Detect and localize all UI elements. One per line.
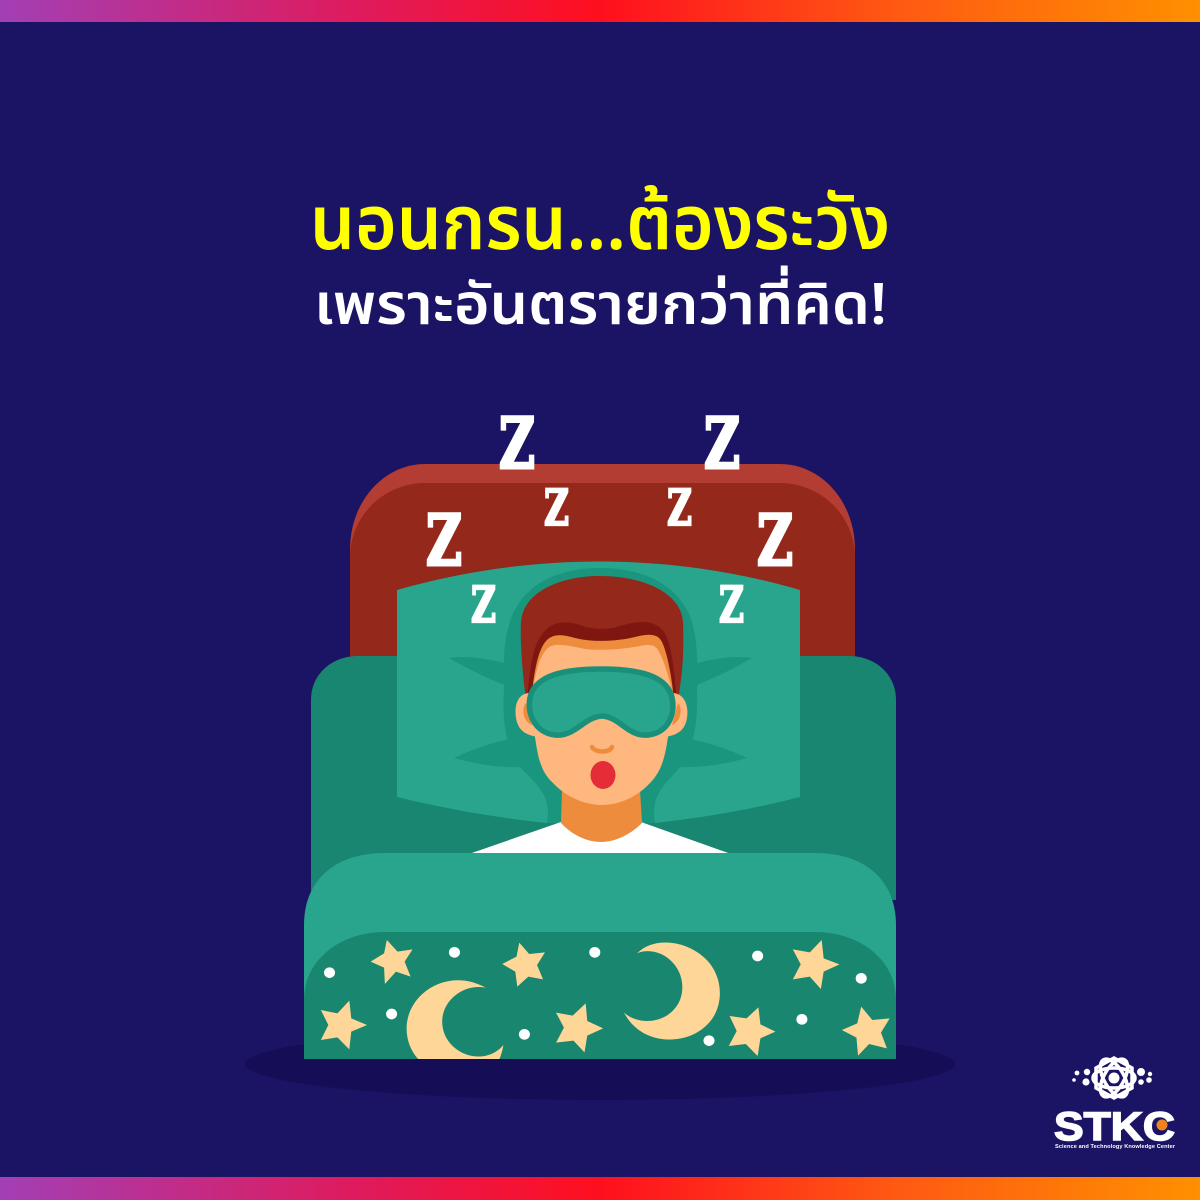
logo tagline: Science and Technology Knowledge Center xyxy=(1055,1144,1176,1150)
title line 2: เพราะอันตรายกว่าที่คิด! xyxy=(314,264,887,350)
neck xyxy=(561,790,642,842)
floor shadow xyxy=(245,1028,955,1100)
nose xyxy=(592,747,612,752)
shirt xyxy=(469,822,731,854)
stars, moons and dots xyxy=(320,940,890,1059)
top gradient bar xyxy=(0,0,1200,22)
sleep Z letters: Z xyxy=(471,575,496,634)
pillow crease right xyxy=(679,657,752,767)
logo atom icon xyxy=(1093,1055,1135,1101)
blanket pattern panel xyxy=(304,932,896,1059)
sleep Z letters: Z xyxy=(719,575,744,634)
moon right xyxy=(624,943,720,1040)
face xyxy=(533,645,672,805)
forehead shade xyxy=(531,635,674,700)
sleep mask xyxy=(529,669,673,735)
bottom gradient bar xyxy=(0,1177,1200,1200)
logo orange dot xyxy=(1156,1120,1168,1130)
title line 1: นอนกรน...ต้องระวัง xyxy=(310,169,890,284)
logo wordmark: STKC xyxy=(1054,1105,1175,1149)
stars xyxy=(320,940,890,1059)
pillow xyxy=(397,562,800,823)
ear shading xyxy=(523,703,681,725)
moon left xyxy=(406,980,504,1059)
logo dots xyxy=(1072,1068,1152,1086)
hair xyxy=(521,576,683,700)
blanket xyxy=(304,853,896,1080)
dots xyxy=(324,947,867,1046)
sleep Z letters: Z xyxy=(544,478,569,537)
sleep Z letters xyxy=(426,402,793,634)
pillow crease left xyxy=(449,657,522,767)
pillow creases and head shadow xyxy=(504,568,697,823)
title xyxy=(310,169,890,350)
hair shadow xyxy=(527,622,677,700)
sleep Z letters: Z xyxy=(499,402,535,485)
logo: STKC xyxy=(1054,1055,1176,1150)
sleep Z letters: Z xyxy=(757,499,793,582)
headboard xyxy=(350,464,855,670)
bed base xyxy=(311,656,896,900)
sleep Z letters: Z xyxy=(667,478,692,537)
sleep Z letters: Z xyxy=(704,402,740,485)
mouth xyxy=(590,761,616,789)
bed illustration xyxy=(304,464,896,1080)
ears xyxy=(516,693,687,737)
sleep Z letters: Z xyxy=(426,499,462,582)
person xyxy=(469,576,731,854)
